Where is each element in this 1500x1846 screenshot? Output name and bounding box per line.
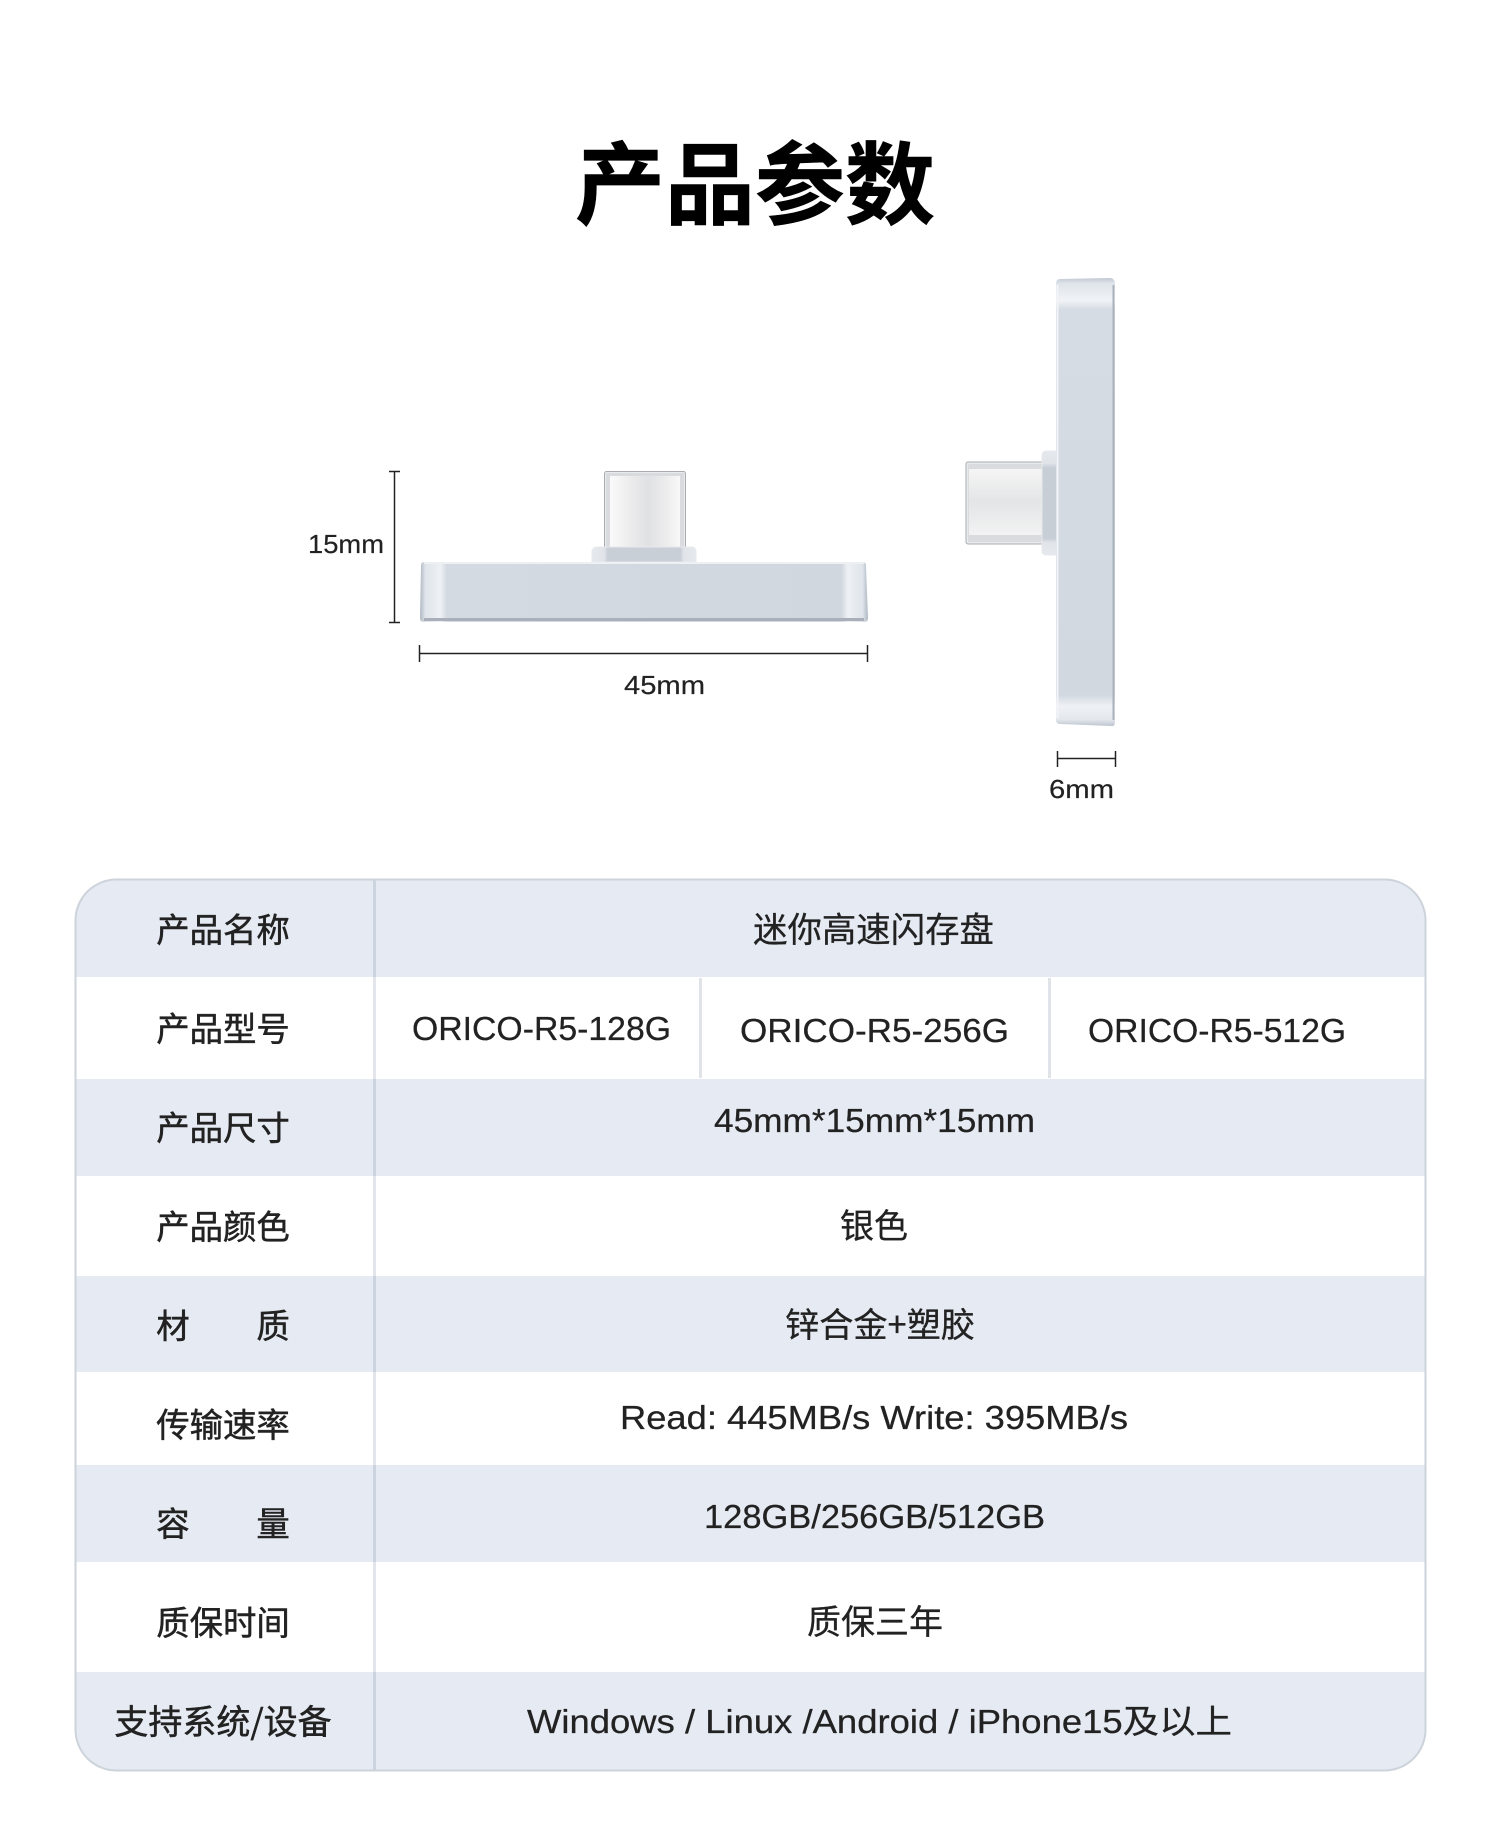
- icon: drive body, front: [420, 562, 868, 622]
- row: warranty: [156, 1595, 943, 1645]
- row: supported systems: 支持系统/设备: [114, 1695, 332, 1744]
- dimension: 6mm depth: [1049, 751, 1116, 804]
- row: transfer speed: Read: 445MB/s Write: 395MB/s: [620, 1399, 1128, 1436]
- icon: USB-C plug, front: [604, 472, 686, 550]
- product side view: [966, 278, 1115, 726]
- specification table: [75, 879, 1426, 1771]
- icon: plug collar, side: [1042, 451, 1057, 555]
- dimension: 45mm width: [420, 645, 868, 700]
- row: material: [156, 1297, 975, 1348]
- row: transfer speed: [156, 1398, 1128, 1447]
- row: warranty: 质保时间: [156, 1596, 290, 1645]
- row: product size: 45mm*15mm*15mm: [714, 1102, 1035, 1139]
- icon: plug collar, front: [592, 547, 696, 562]
- row: supported systems: [114, 1695, 1232, 1744]
- row: material: 材 质: [156, 1299, 290, 1348]
- dimension: 15mm height: 15mm: [308, 529, 384, 559]
- row: product model: [156, 1002, 1346, 1051]
- title: 产品参数: [575, 113, 935, 243]
- row: warranty: 质保三年: [807, 1595, 943, 1644]
- row: supported systems: Windows / Linux /Android / iPhone15及以上: [527, 1703, 1232, 1740]
- dimension: 45mm width: 45mm: [624, 670, 705, 700]
- product front view: [420, 472, 868, 622]
- row: product name: [156, 902, 994, 952]
- row: product model: ORICO-R5-256G: [740, 1012, 1009, 1049]
- row: transfer speed: 传输速率: [156, 1398, 290, 1447]
- row: capacity: [156, 1497, 1045, 1546]
- row: product name: 产品名称: [156, 903, 290, 952]
- table row backgrounds: [75, 879, 1426, 1771]
- row: product color: [156, 1199, 908, 1249]
- row: product model: 产品型号: [156, 1002, 290, 1051]
- row: capacity: 容 量: [156, 1497, 290, 1546]
- row: product color: 银色: [840, 1199, 908, 1248]
- row: product size: 产品尺寸: [156, 1101, 290, 1150]
- row: product model: ORICO-R5-512G: [1088, 1012, 1346, 1049]
- row: material: 锌合金+塑胶: [785, 1297, 975, 1347]
- row: product color: 产品颜色: [156, 1200, 290, 1249]
- dimension: 15mm height: [308, 472, 400, 622]
- icon: USB-C plug, side: [966, 462, 1043, 544]
- row: product size: [156, 1101, 1035, 1150]
- icon: drive body, side: [1056, 278, 1115, 726]
- dimension: 6mm depth: 6mm: [1049, 774, 1114, 804]
- row: capacity: 128GB/256GB/512GB: [704, 1498, 1045, 1535]
- row: product name: 迷你高速闪存盘: [753, 902, 994, 952]
- row: product model: ORICO-R5-128G: [412, 1010, 671, 1047]
